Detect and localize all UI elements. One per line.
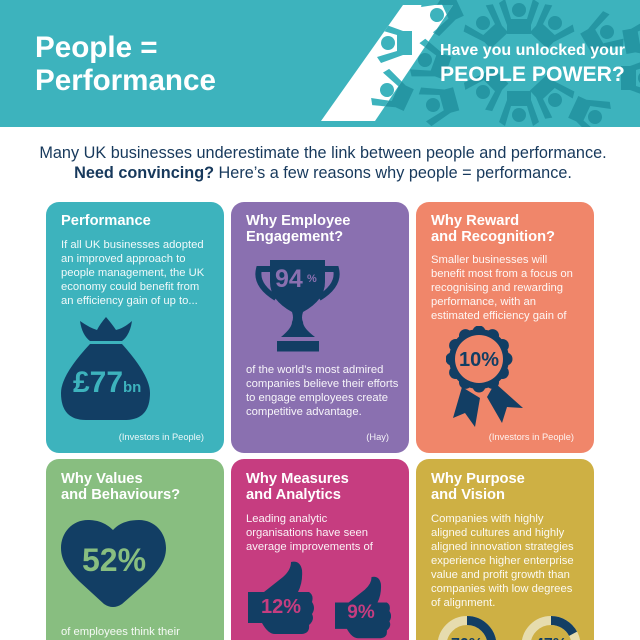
heading: Why Purpose: [431, 471, 525, 487]
icon: trophy: 94: [275, 265, 303, 293]
body text: an efficiency gain of up to...: [61, 295, 198, 307]
icon: money bag: £77: [73, 366, 123, 399]
body text: [246, 364, 398, 418]
body text: estimated efficiency gain of: [431, 310, 566, 322]
heading: Performance: [61, 213, 151, 229]
body text: experience higher enterprise: [431, 555, 574, 567]
source: (Investors in People): [119, 432, 204, 442]
body text: an improved approach to: [61, 253, 185, 265]
panel: measures and analytics: [231, 459, 409, 640]
heading: and Recognition?: [431, 229, 555, 245]
body text: to engage employees create: [246, 392, 388, 404]
body text: value and profit growth than: [431, 569, 570, 581]
panel: employee engagement: [231, 202, 409, 453]
body text: benefit most from a focus on: [431, 268, 573, 280]
donut chart: 47%: [522, 616, 580, 640]
heading: Why Values: [61, 471, 143, 487]
body text: competitive advantage.: [246, 406, 362, 418]
panel: performance: [46, 202, 224, 453]
heading: [61, 471, 180, 503]
title: Performance: [35, 64, 216, 97]
title: [35, 31, 216, 97]
panel: purpose and vision: [416, 459, 594, 640]
icon: money bag: [61, 317, 150, 420]
body text: [246, 513, 373, 553]
body text: Smaller businesses will: [431, 254, 547, 266]
donut chart: 70%: [438, 616, 496, 640]
body text: of alignment.: [431, 597, 495, 609]
icon: trophy: %: [307, 273, 317, 285]
heading: and Behaviours?: [61, 487, 180, 503]
icon: rosette: 10%: [459, 349, 499, 371]
icon: small thumbs up: 9%: [347, 602, 375, 623]
body text: economy could benefit from: [61, 281, 199, 293]
heading: [431, 213, 555, 245]
icon: rosette: [446, 326, 523, 427]
body text: organisations have seen: [246, 527, 368, 539]
heading: Why Measures: [246, 471, 349, 487]
heading: [246, 213, 350, 245]
body text: of the world’s most admired: [246, 364, 383, 376]
header banner: [0, 0, 640, 127]
icon: money bag: bn: [123, 379, 141, 396]
tagline: [440, 42, 625, 86]
source: (Hay): [366, 432, 389, 442]
body text: people management, the UK: [61, 267, 204, 279]
body text: performance, with an: [431, 296, 536, 308]
heading: Why Reward: [431, 213, 519, 229]
body text: [431, 513, 574, 609]
body text: Leading analytic: [246, 513, 327, 525]
tagline: Have you unlocked your: [440, 42, 625, 59]
intro text: Many UK businesses underestimate the link between people and performance.: [39, 144, 607, 162]
icon: small thumbs up: [335, 576, 391, 638]
intro text: Need convincing? Here’s a few reasons why people = performance.: [74, 164, 572, 182]
body text: Companies with highly: [431, 513, 544, 525]
heading: and Analytics: [246, 487, 341, 503]
icon: heart: [61, 520, 166, 607]
body text: aligned cultures and highly: [431, 527, 564, 539]
heading: [431, 471, 525, 503]
body text: of employees think their: [61, 626, 180, 638]
panel: values and behaviours: [46, 459, 224, 640]
body text: aligned innovation strategies: [431, 541, 574, 553]
people pattern and white band: [321, 0, 640, 127]
panel: reward and recognition: [416, 202, 594, 453]
title: People =: [35, 31, 158, 64]
tagline: PEOPLE POWER?: [440, 63, 625, 86]
body text: companies believe their efforts: [246, 378, 398, 390]
heading: Why Employee: [246, 213, 350, 229]
icon: large thumbs up: [248, 562, 314, 634]
icon: large thumbs up: 12%: [261, 596, 301, 618]
icon: trophy: [255, 260, 340, 352]
body text: companies with low degrees: [431, 583, 572, 595]
body text: [61, 239, 204, 307]
body text: If all UK businesses adopted: [61, 239, 204, 251]
heading: Engagement?: [246, 229, 343, 245]
heading: [246, 471, 349, 503]
body text: recognising and rewarding: [431, 282, 563, 294]
intro text: [39, 144, 607, 182]
heading: and Vision: [431, 487, 505, 503]
body text: average improvements of: [246, 541, 373, 553]
source: (Investors in People): [489, 432, 574, 442]
icon: heart: 52%: [82, 542, 146, 578]
body text: [431, 254, 573, 322]
